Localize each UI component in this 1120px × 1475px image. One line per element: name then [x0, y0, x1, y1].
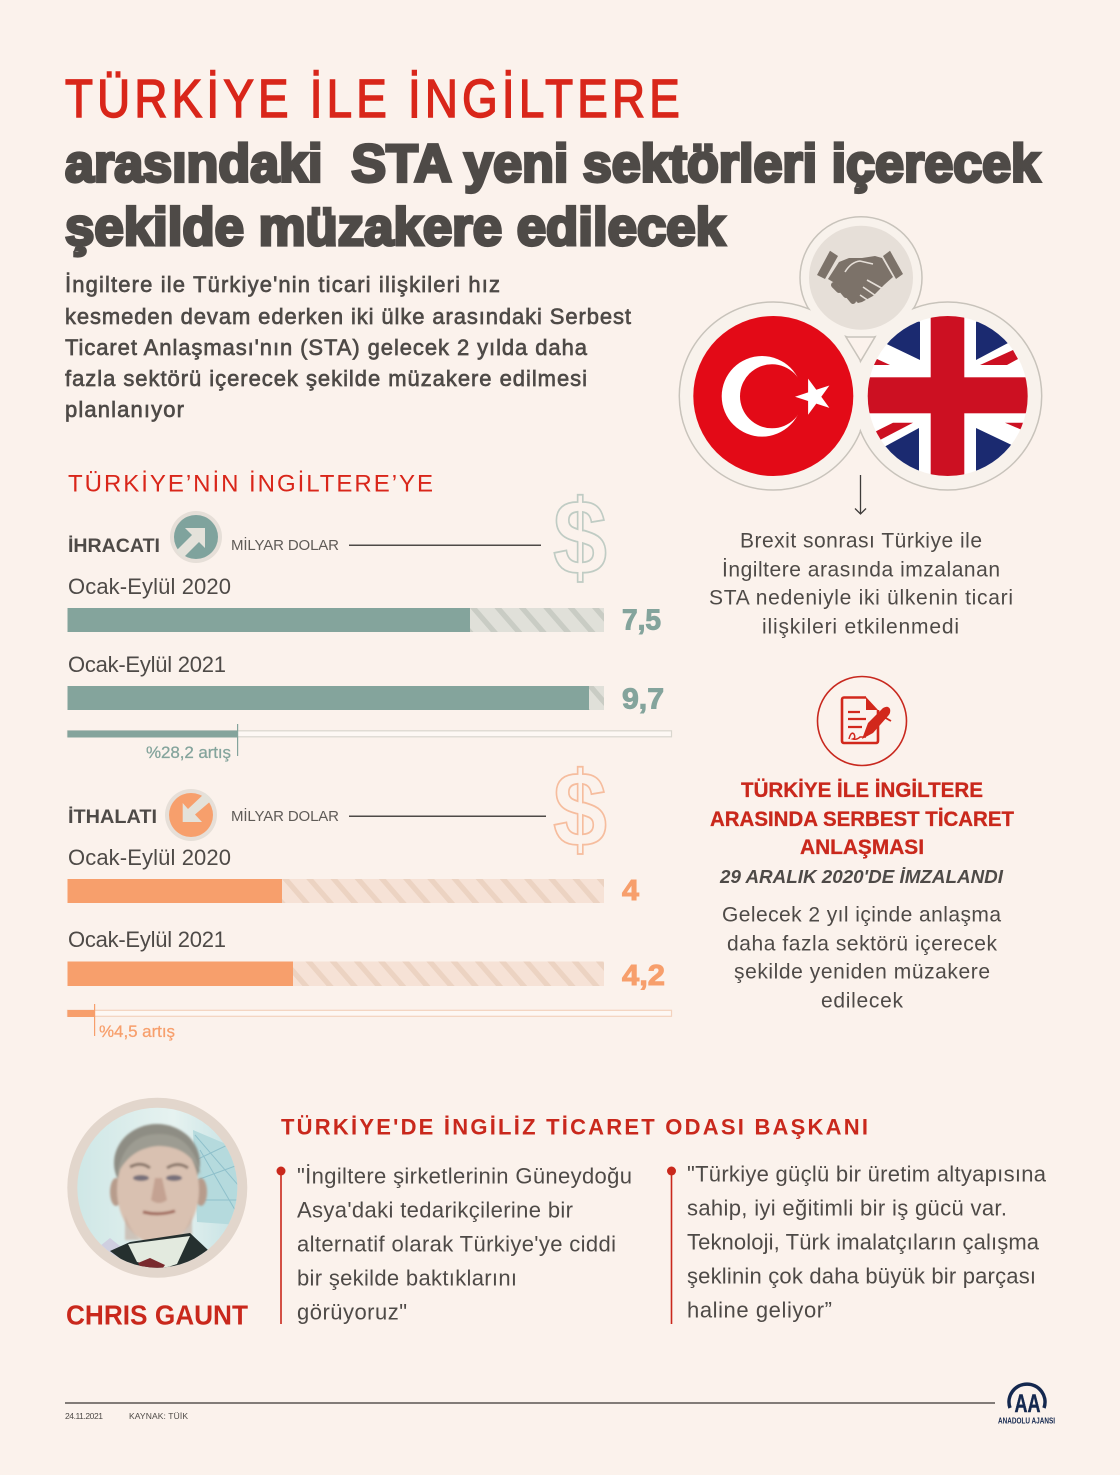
- quote 2: "Türkiye güçlü bir üretim altyapısına: [687, 1162, 1047, 1186]
- value: 4,2: [622, 960, 665, 992]
- footer: [65, 1402, 995, 1421]
- quote 1: bir şekilde baktıklarını: [297, 1266, 517, 1290]
- unit label: MİLYAR DOLAR: [231, 807, 339, 825]
- increase bar: [68, 724, 672, 756]
- title: [65, 69, 1041, 257]
- agreement heading: TÜRKİYE İLE İNGİLTERE: [741, 779, 983, 802]
- panel: import: [68, 749, 672, 1041]
- brexit note: [709, 530, 1013, 638]
- quote 2: haline geliyor”: [687, 1298, 832, 1322]
- quotes heading: TÜRKİYE'DE İNGİLİZ TİCARET ODASI BAŞKANI: [281, 1114, 868, 1140]
- icon: dollar: $: [553, 749, 607, 869]
- intro text: kesmeden devam ederken iki ülke arasındaki Serbest: [65, 304, 631, 329]
- quote 1: görüyoruz": [297, 1300, 407, 1324]
- label: 2020: Ocak-Eylül 2020: [68, 574, 231, 599]
- value: 9,7: [622, 684, 664, 716]
- unit label: MİLYAR DOLAR: [231, 536, 339, 554]
- brexit note: Brexit sonrası Türkiye ile: [740, 530, 982, 552]
- increase label: %28,2 artış: [146, 743, 231, 762]
- agreement date: 29 ARALIK 2020'DE İMZALANDI: [719, 867, 1004, 887]
- arrow down: [855, 475, 866, 514]
- value: 7,5: [622, 604, 661, 636]
- bar: export 2021: [68, 686, 604, 710]
- quote 1: Asya'daki tedarikçilerine bir: [297, 1198, 573, 1222]
- panel: export: [68, 477, 672, 762]
- bar: import 2020: [68, 879, 604, 903]
- icon: up arrow: [170, 511, 222, 563]
- logo: Anadolu Ajansı: AA: [1014, 1390, 1040, 1418]
- icon: document and pen: [818, 676, 906, 766]
- label: 2021: Ocak-Eylül 2021: [68, 927, 226, 952]
- logo: Anadolu Ajansı: ANADOLU AJANSI: [998, 1416, 1055, 1426]
- intro text: İngiltere ile Türkiye'nin ticari ilişkileri hız: [65, 272, 500, 297]
- brexit note: İngiltere arasında imzalanan: [722, 558, 1000, 582]
- quote 2: şeklinin çok daha büyük bir parçası: [687, 1264, 1036, 1288]
- intro text: planlanıyor: [65, 397, 184, 422]
- agreement note: edilecek: [821, 990, 904, 1012]
- agreement heading: [710, 779, 1014, 859]
- increase bar: [68, 1004, 672, 1036]
- title: şekilde müzakere edilecek: [65, 198, 726, 257]
- section heading: TÜRKİYE’NİN İNGİLTERE’YE: [68, 470, 433, 498]
- value: 4: [622, 875, 639, 907]
- icon: dollar: $: [553, 477, 607, 597]
- portrait: Chris Gaunt: [67, 1098, 247, 1278]
- speaker name: CHRIS GAUNT: [66, 1300, 248, 1330]
- footer: 24.11.2021: [65, 1411, 103, 1421]
- agreement heading: ANLAŞMASI: [800, 836, 924, 859]
- title: TÜRKİYE İLE İNGİLTERE: [65, 69, 684, 129]
- brexit note: STA nedeniyle iki ülkenin ticari: [709, 586, 1013, 610]
- quote 2: Teknoloji, Türk imalatçıların çalışma: [687, 1230, 1040, 1254]
- icon: down arrow: [165, 789, 217, 841]
- quote 2: sahip, iyi eğitimli bir iş gücü var.: [687, 1196, 1007, 1220]
- quote 1: [276, 1164, 632, 1324]
- label: 2021: Ocak-Eylül 2021: [68, 652, 226, 677]
- intro text: [65, 272, 631, 422]
- flags and handshake emblem: [679, 217, 1042, 490]
- flag: Turkey: [693, 316, 853, 476]
- title: arasındaki STA yeni sektörleri içerecek: [65, 134, 1041, 194]
- intro text: fazla sektörü içerecek şekilde müzakere edilmesi: [65, 366, 587, 391]
- import label: İTHALATI: [68, 805, 157, 828]
- bar: import 2021: [68, 962, 604, 986]
- quote 1: "İngiltere şirketlerinin Güneydoğu: [297, 1164, 632, 1188]
- brexit note: ilişkileri etkilenmedi: [762, 616, 959, 638]
- increase label: %4,5 artış: [99, 1022, 175, 1041]
- export label: İHRACATI: [68, 534, 160, 557]
- agreement note: [722, 904, 1001, 1012]
- quote 1: alternatif olarak Türkiye'ye ciddi: [297, 1232, 616, 1256]
- footer: KAYNAK: TÜİK: [129, 1411, 188, 1421]
- agreement heading: ARASINDA SERBEST TİCARET: [710, 808, 1014, 831]
- icon: handshake: [817, 251, 903, 303]
- agreement note: şekilde yeniden müzakere: [734, 960, 990, 984]
- flag: United Kingdom: [865, 314, 1031, 478]
- bar: export 2020: [68, 608, 604, 632]
- agreement note: Gelecek 2 yıl içinde anlaşma: [722, 904, 1001, 926]
- logo: Anadolu Ajansı: [998, 1384, 1055, 1426]
- agreement note: daha fazla sektörü içerecek: [727, 932, 998, 956]
- intro text: Ticaret Anlaşması'nın (STA) gelecek 2 yılda daha: [65, 335, 588, 360]
- label: 2020: Ocak-Eylül 2020: [68, 845, 231, 870]
- quote 2: [667, 1162, 1047, 1324]
